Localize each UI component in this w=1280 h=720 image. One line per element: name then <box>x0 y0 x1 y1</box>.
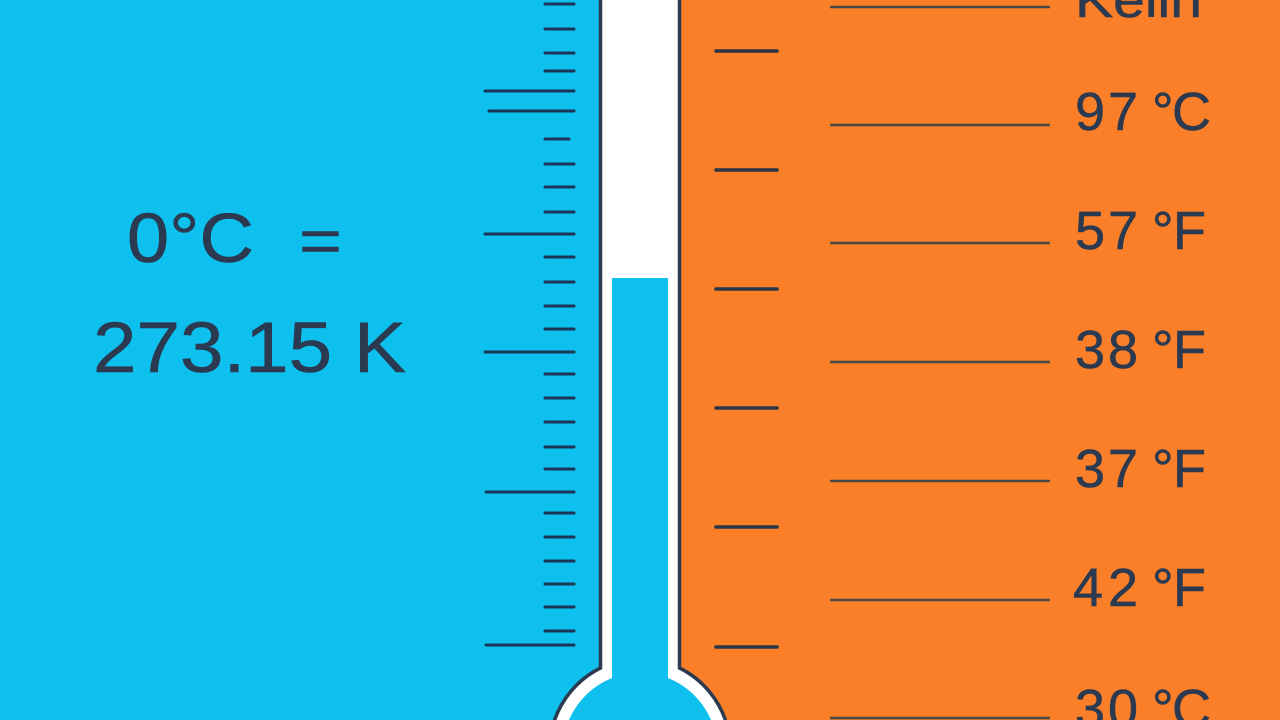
label: 57 F: 57 °F <box>1075 201 1206 261</box>
celsius value: 0°C <box>127 199 254 277</box>
equals sign: = <box>299 207 342 276</box>
left scale tick marks <box>485 4 574 645</box>
thermometer <box>553 0 727 720</box>
right short tick marks <box>716 51 777 647</box>
label: 37 F: 37 °F <box>1075 439 1206 499</box>
panel: warm side <box>640 0 1280 720</box>
right scale labels <box>1073 0 1211 720</box>
equivalence text <box>93 199 406 388</box>
kelvin value: 273.15 K <box>93 309 406 388</box>
right long label lines <box>830 7 1050 718</box>
thermometer liquid column and bulb <box>567 278 713 720</box>
label: 38 F: 38 °F <box>1075 320 1206 380</box>
panel: cold side <box>0 0 640 720</box>
label: 97 C: 97 °C <box>1075 82 1211 142</box>
thermometer glass outline and interior <box>553 0 727 720</box>
label: 42 F: 42 °F <box>1073 558 1206 618</box>
